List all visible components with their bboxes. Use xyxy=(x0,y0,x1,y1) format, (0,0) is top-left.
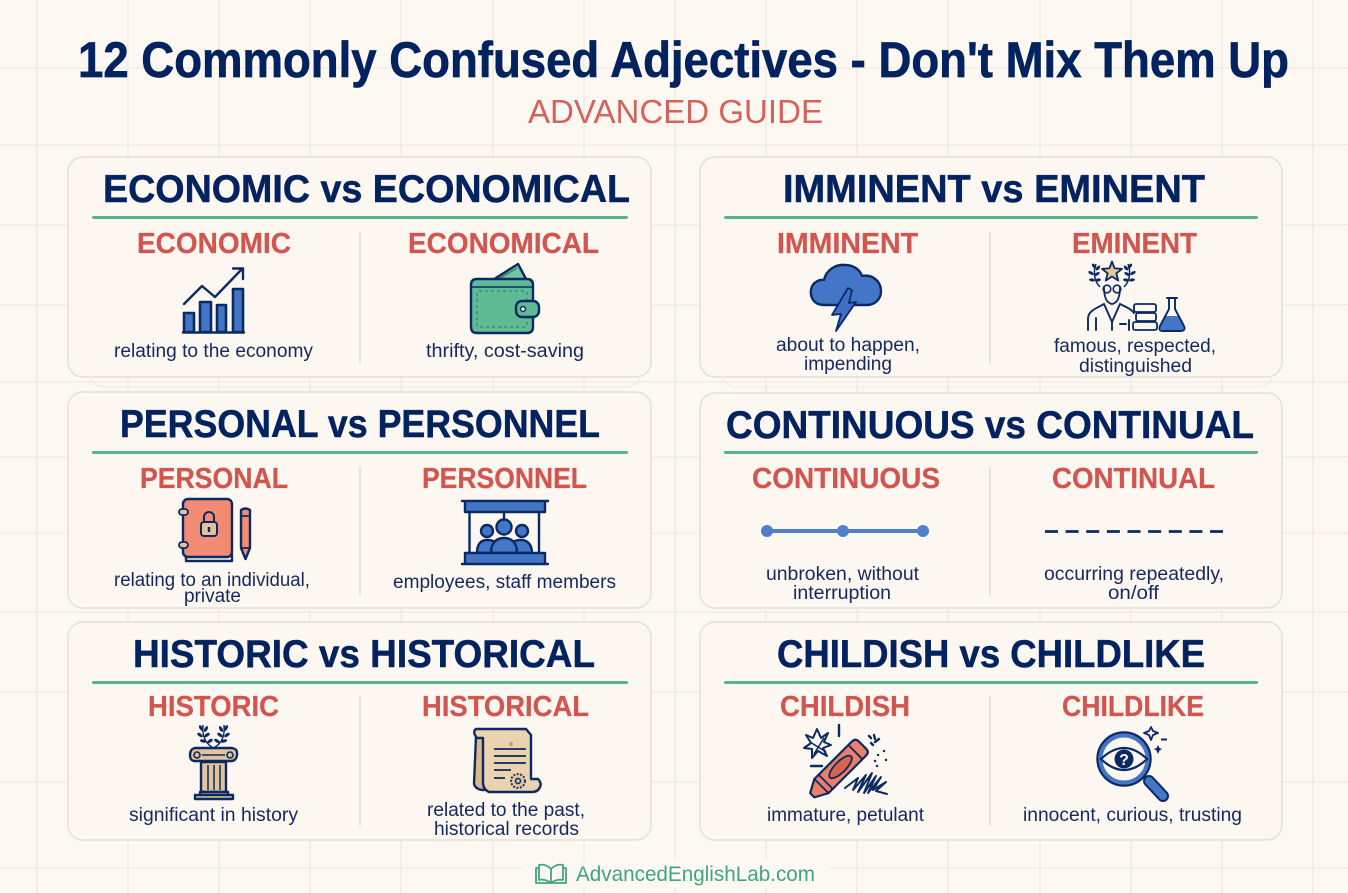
icon: rising bar chart xyxy=(183,268,244,332)
definition: imminent xyxy=(776,335,920,375)
icon: magnifier over eye xyxy=(1098,727,1167,796)
heading: HISTORIC vs HISTORICAL xyxy=(133,633,595,676)
definition: personal xyxy=(114,570,310,607)
definition: eminent xyxy=(1054,336,1216,377)
definition: personnel: employees, staff members xyxy=(393,572,616,593)
definition: historic: significant in history xyxy=(129,805,299,826)
icon: storm cloud xyxy=(811,265,881,331)
icon: unbroken line xyxy=(761,525,929,537)
panel: continuous vs continual xyxy=(700,393,1282,608)
icon: locked notebook and pencil xyxy=(179,499,250,561)
icon: eminent scientist xyxy=(1088,262,1184,331)
panel: imminent vs eminent xyxy=(700,157,1282,377)
panel: childish vs childlike xyxy=(700,622,1282,840)
icon: dashed line xyxy=(1045,530,1223,533)
definition: historical: related to the past, xyxy=(427,800,585,821)
definition: personal: relating to an individual, xyxy=(114,570,310,591)
definition: continuous: interruption xyxy=(793,583,891,604)
label: economical: ECONOMICAL xyxy=(408,228,599,260)
icon: column with laurel xyxy=(190,724,237,799)
website: AdvancedEnglishLab.com xyxy=(576,863,815,886)
definition: historical: historical records xyxy=(434,819,579,840)
label: continual: CONTINUAL xyxy=(1052,463,1215,495)
label: economic: ECONOMIC xyxy=(137,228,291,260)
footer xyxy=(522,860,830,888)
definition: imminent: about to happen, xyxy=(776,335,920,356)
definition: economic: relating to the economy xyxy=(114,341,313,362)
label: historical: HISTORICAL xyxy=(422,691,589,723)
definition: childlike: innocent, curious, trusting xyxy=(1023,805,1242,826)
label: childlike: CHILDLIKE xyxy=(1062,691,1204,723)
icon: wallet with cash xyxy=(471,264,539,333)
definition: childish: immature, petulant xyxy=(767,805,925,826)
label: historic: HISTORIC xyxy=(148,691,279,723)
panel: economic vs economical xyxy=(68,157,651,377)
label: personnel: PERSONNEL xyxy=(422,463,587,495)
label: continuous: CONTINUOUS xyxy=(752,463,940,495)
label: imminent: IMMINENT xyxy=(777,228,918,260)
icon: magnifier over eye: ? xyxy=(1119,752,1129,769)
definition: imminent: impending xyxy=(804,354,892,375)
definition: continuous xyxy=(766,564,920,604)
definition: continual: on/off xyxy=(1108,583,1160,604)
definition: continual xyxy=(1044,564,1224,604)
label: personal: PERSONAL xyxy=(140,463,288,495)
definition: continual: occurring repeatedly, xyxy=(1044,564,1224,585)
subtitle: ADVANCED GUIDE xyxy=(528,93,823,130)
heading: PERSONAL vs PERSONNEL xyxy=(120,403,600,446)
label: eminent: EMINENT xyxy=(1072,228,1197,260)
panel: personal vs personnel xyxy=(68,392,651,608)
heading: IMMINENT vs EMINENT xyxy=(783,168,1205,211)
heading: CHILDISH vs CHILDLIKE xyxy=(777,633,1205,676)
icon: open book xyxy=(536,865,566,883)
definition: historical xyxy=(427,800,585,840)
icon: parchment scroll xyxy=(474,729,541,792)
icon: staff group in frame xyxy=(462,501,548,564)
label: childish: CHILDISH xyxy=(780,691,910,723)
definition: economical: thrifty, cost-saving xyxy=(426,341,584,362)
definition: eminent: famous, respected, xyxy=(1054,336,1216,357)
panel: historic vs historical xyxy=(68,622,651,840)
icon: crayon and scribble xyxy=(804,725,887,802)
heading: CONTINUOUS vs CONTINUAL xyxy=(726,404,1254,447)
definition: eminent: distinguished xyxy=(1079,356,1192,377)
heading: ECONOMIC vs ECONOMICAL xyxy=(103,168,630,211)
definition: continuous: unbroken, without xyxy=(766,564,920,585)
definition: personal: private xyxy=(184,586,241,607)
